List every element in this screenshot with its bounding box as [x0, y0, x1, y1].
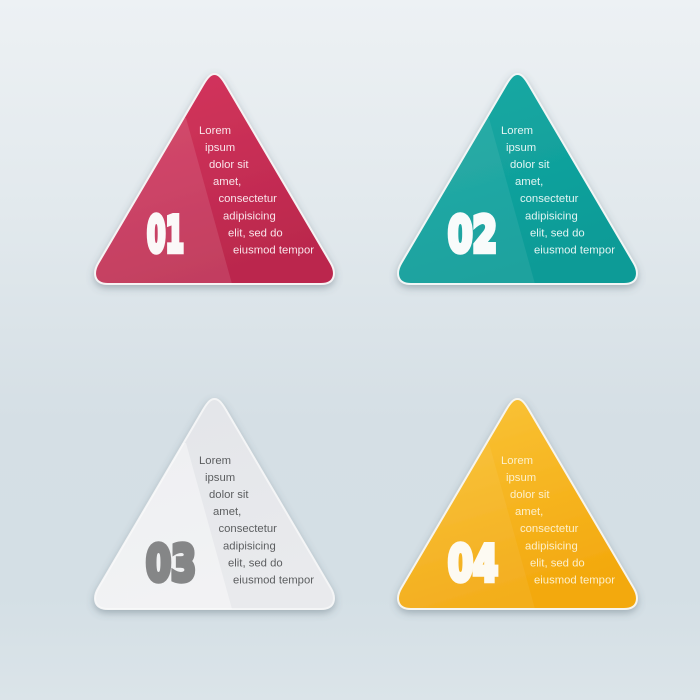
- text block 03: amet,: [213, 506, 241, 518]
- text block 02: adipisicing: [525, 210, 578, 222]
- panel: triangle 04: [383, 399, 637, 609]
- text block 03: Lorem: [199, 455, 231, 467]
- number 02: 02: [448, 207, 497, 263]
- text block 01: dolor sit: [209, 159, 249, 171]
- text block 03: eiusmod tempor: [233, 574, 314, 586]
- text block 03: ipsum: [205, 472, 235, 484]
- text block 04: [501, 455, 615, 586]
- text block 03: dolor sit: [209, 489, 249, 501]
- text block 01: adipisicing: [223, 210, 276, 222]
- text block 02: Lorem: [501, 125, 533, 137]
- text block 04: eiusmod tempor: [534, 574, 615, 586]
- panel: triangle 02: [383, 74, 637, 284]
- text block 02: ipsum: [506, 142, 536, 154]
- text block 02: amet,: [515, 176, 543, 188]
- text block 04: consectetur: [520, 523, 579, 535]
- text block 02: elit, sed do: [530, 228, 585, 240]
- text block 02: dolor sit: [510, 159, 550, 171]
- text block 01: eiusmod tempor: [233, 244, 314, 256]
- text block 01: Lorem: [199, 125, 231, 137]
- number 01: 01: [147, 207, 184, 263]
- text block 02: [501, 125, 615, 256]
- text block 01: ipsum: [205, 142, 235, 154]
- text block 01: [199, 125, 314, 256]
- text block 04: Lorem: [501, 455, 533, 467]
- number 04: 04: [448, 536, 498, 592]
- text block 03: [199, 455, 314, 586]
- text block 01: consectetur: [218, 193, 277, 205]
- text block 01: elit, sed do: [228, 228, 283, 240]
- text block 04: ipsum: [506, 472, 536, 484]
- text block 02: eiusmod tempor: [534, 244, 615, 256]
- text block 04: adipisicing: [525, 540, 578, 552]
- text block 03: elit, sed do: [228, 558, 283, 570]
- number 03: 03: [146, 536, 196, 592]
- text block 04: elit, sed do: [530, 558, 585, 570]
- panel: triangle 03: [80, 399, 334, 609]
- text block 02: consectetur: [520, 193, 579, 205]
- panel: triangle 01: [80, 74, 334, 284]
- text block 03: adipisicing: [223, 540, 276, 552]
- text block 04: amet,: [515, 506, 543, 518]
- text block 04: dolor sit: [510, 489, 550, 501]
- text block 01: amet,: [213, 176, 241, 188]
- text block 03: consectetur: [218, 523, 277, 535]
